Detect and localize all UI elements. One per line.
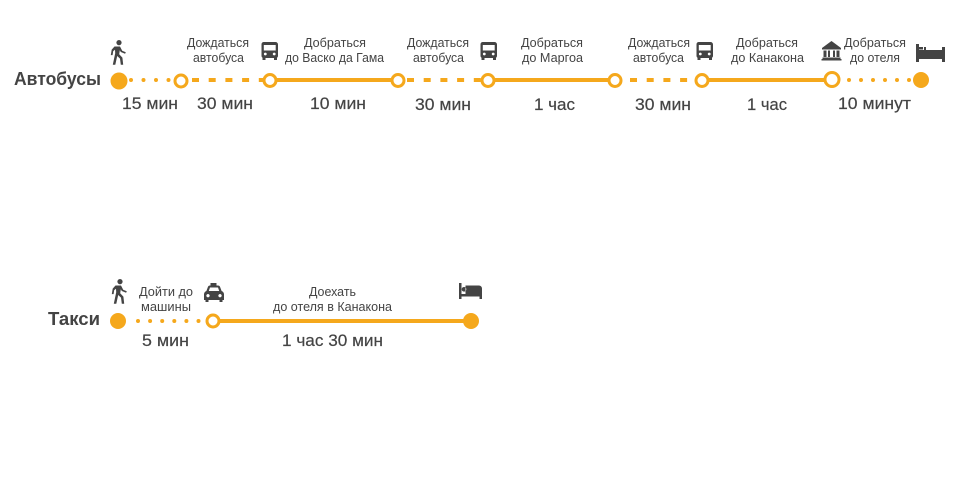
time: 30 min: 30 мин [635,95,691,114]
icon: taxi [204,283,224,302]
route line: taxi [110,313,479,329]
time: 10 minutes: 10 минут [838,94,911,113]
stop 7 [825,72,839,86]
time: 5 min: 5 мин [142,331,189,350]
time: 10 min: 10 мин [310,94,366,113]
label: to Margao: Добраться [521,36,583,50]
time: 30 min: 30 мин [197,94,253,113]
end stop [463,313,479,329]
walk segment [131,78,181,82]
stop 4 [482,74,494,86]
label: wait for bus 1: автобуса [193,51,244,65]
heading: Такси: Такси [48,308,100,329]
start stop [110,313,126,329]
label: to the hotel: до отеля [850,51,900,65]
end stop [913,72,929,88]
label: to Vasco da Gama: до Васко да Гама [285,51,384,65]
wait segment 2 [402,78,488,82]
label: drive to hotel: Доехать [309,285,356,299]
label: to Canacona: до Канакона [731,51,804,65]
icon: bed 2 [459,283,482,299]
stop 2 [264,74,276,86]
icon: walking person [111,40,126,65]
ride to hotel [213,319,471,323]
time: 1 hour: 1 час [534,95,575,114]
ride to Margao [488,78,615,82]
time: 15 min: 15 мин [122,94,178,113]
label: to Canacona: Добраться [736,36,798,50]
wait segment 3 [630,78,702,82]
label: walk to car: машины [141,300,191,314]
label: wait for bus 2: Дождаться [407,36,469,50]
wait segment 1 [192,78,270,82]
icon: bus 2 [480,42,497,60]
walk to hotel [849,78,912,82]
label: to the hotel: Добраться [844,36,906,50]
label: to Vasco da Gama: Добраться [304,36,366,50]
label: wait for bus 1: Дождаться [187,36,249,50]
label: drive to hotel: до отеля в Канакона [273,300,392,314]
route line: buses [110,72,929,90]
time: 1 h 30 min: 1 час 30 мин [282,331,383,350]
ride to Vasco da Gama [270,78,398,82]
stop 3 [392,74,404,86]
icon: bus 1 [261,42,278,60]
label: walk to car: Дойти до [139,285,193,299]
label: wait for bus 3: Дождаться [628,36,690,50]
stop 1 [175,75,187,87]
icon: bed 1 [916,44,945,62]
walk to car [138,319,205,323]
heading: Автобусы: Автобусы [14,68,101,89]
label: to Margao: до Маргоа [522,51,583,65]
icon: walking person [112,279,127,304]
ride to Canacona [702,78,832,82]
taxi stop [207,315,219,327]
time: 1 hour: 1 час [747,95,787,114]
stop 5 [609,74,621,86]
icon: museum building [822,41,842,60]
stop 6 [696,74,708,86]
label: wait for bus 2: автобуса [413,51,464,65]
icon: bus 3 [696,42,713,60]
label: wait for bus 3: автобуса [633,51,684,65]
start stop [110,72,128,90]
time: 30 min: 30 мин [415,95,471,114]
